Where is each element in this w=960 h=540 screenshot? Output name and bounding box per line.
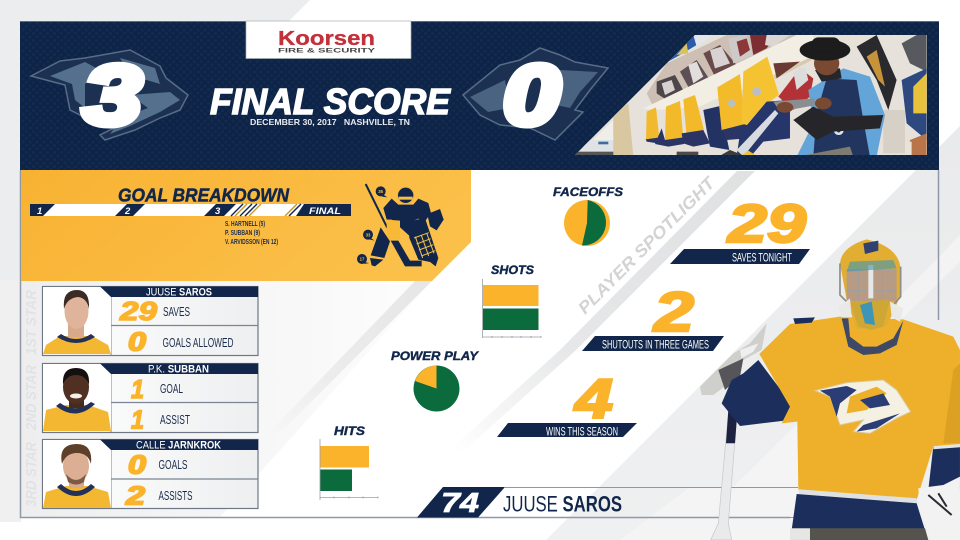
- jersey crest: [815, 380, 911, 433]
- stat: goals allowed: GOALS ALLOWED: [162, 336, 234, 350]
- home score number: 0: [503, 48, 560, 142]
- stat: wins: [497, 367, 637, 438]
- chart: hits: [320, 426, 378, 500]
- person: stick blade and hands: [773, 98, 816, 110]
- stat: goals allowed: 0: [128, 326, 147, 356]
- icon: goalie: 35: [378, 189, 384, 194]
- name header: [100, 286, 258, 297]
- stat: goal: GOAL: [160, 382, 183, 396]
- stat: assist: [131, 404, 190, 434]
- sidebar labels: star rankings: 3RD STAR: [23, 442, 40, 507]
- stat: saves tonight: 29: [727, 194, 806, 254]
- header band: [20, 21, 939, 170]
- person: head and hat: [815, 68, 842, 82]
- period bar: 3: [215, 206, 221, 217]
- chart: power play: [391, 351, 479, 412]
- stat: saves tonight: SAVES TONIGHT: [732, 252, 792, 264]
- upper wall: [647, 35, 800, 107]
- stat: shutouts: 2: [653, 280, 694, 343]
- stat: assists: 2: [125, 480, 146, 510]
- panel: second star card: [42, 364, 258, 434]
- player nameplate: JUUSE SAROS: [503, 492, 622, 516]
- hem: [798, 489, 917, 503]
- navy sleeve: [722, 360, 793, 426]
- name header: [100, 440, 258, 450]
- period bar: 2: [124, 206, 131, 217]
- goalie mask: [838, 239, 903, 330]
- stat: assists: [125, 480, 192, 510]
- stat: assists: ASSISTS: [158, 489, 192, 503]
- goal scorers list: V. ARVIDSSON (EN 12): [225, 237, 278, 246]
- logo: Minnesota Wild: [463, 48, 608, 140]
- panel: goal breakdown: [21, 170, 471, 281]
- sidebar labels: star rankings: [23, 290, 40, 507]
- period bar: 1: [37, 206, 42, 217]
- jersey: [759, 317, 960, 500]
- player spotlight label: PLAYER SPOTLIGHT: [574, 172, 720, 318]
- panel: second star card: P.K. SUBBAN: [148, 364, 209, 376]
- stat: goals: 0: [128, 450, 147, 480]
- player nameplate: 74: [441, 487, 480, 518]
- floor items: [676, 152, 698, 155]
- player photo: Saros: [43, 287, 111, 354]
- right arm sleeve: [928, 445, 960, 490]
- stat: saves tonight: [670, 194, 810, 264]
- stat: goal: [131, 374, 183, 404]
- stat: saves: 29: [119, 296, 158, 326]
- away score number: 3: [83, 48, 142, 142]
- panel: first star card: [42, 286, 258, 356]
- stat: goals allowed: [128, 326, 234, 356]
- stat: assist: 1: [131, 404, 144, 434]
- sponsor logo: FIRE & SECURITY: [278, 48, 376, 54]
- period bar: FINAL: [309, 206, 341, 217]
- jerseys: [646, 107, 659, 140]
- panel: first star card: JUUSE SAROS: [146, 286, 212, 298]
- right lockers: [857, 35, 897, 110]
- icon: goalie: [357, 184, 444, 266]
- chart: faceoffs: FACEOFFS: [553, 187, 623, 199]
- photo: locker room: [575, 35, 927, 157]
- stat: assist: ASSIST: [160, 413, 190, 427]
- player photo: Subban: [43, 364, 111, 431]
- chart: faceoffs: [553, 187, 623, 246]
- sidebar labels: star rankings: 1ST STAR: [23, 290, 40, 355]
- chart: hits: HITS: [334, 426, 365, 438]
- stat: saves: [119, 296, 190, 326]
- sidebar labels: star rankings: 2ND STAR: [23, 365, 40, 431]
- frame: [20, 170, 938, 518]
- red gear: [778, 68, 813, 110]
- title: FINAL SCORE: [210, 81, 451, 122]
- sponsor logo: [246, 21, 411, 58]
- jersey collar: [842, 318, 903, 355]
- period bar: [30, 204, 351, 217]
- name header: [100, 364, 258, 374]
- player figure: goalie Juuse Saros: [700, 239, 960, 540]
- blocker glove: [918, 477, 960, 540]
- date and location: DECEMBER 30, 2017 NASHVILLE, TN: [250, 117, 410, 127]
- person: jersey: [797, 68, 885, 157]
- chart: power play: POWER PLAY: [391, 351, 479, 363]
- icon: goalie: 17: [360, 257, 365, 262]
- shelf: [644, 35, 813, 110]
- goal scorers list: [225, 219, 278, 246]
- skates: [656, 75, 683, 98]
- logo: Nashville Predators: [31, 50, 188, 140]
- stat: wins: 4: [574, 367, 613, 430]
- panel: third star card: CALLE JARNKROK: [136, 440, 221, 452]
- player photo: Jarnkrok: [43, 440, 111, 508]
- chart: shots: [482, 265, 541, 338]
- stat: shutouts: [582, 280, 724, 352]
- left glove: [700, 323, 767, 395]
- player nameplate: [417, 487, 798, 518]
- heading: goal breakdown: GOAL BREAKDOWN: [118, 184, 290, 206]
- goal scorers list: S. HARTNELL (5): [225, 219, 265, 228]
- panel: third star card: [42, 440, 258, 510]
- chart: shots: SHOTS: [491, 265, 534, 277]
- stat: goal: 1: [131, 374, 144, 404]
- icon: goalie: 33: [366, 232, 371, 237]
- stat: wins: WINS THIS SEASON: [546, 426, 618, 438]
- hockey stick: [711, 377, 740, 540]
- stat: goals: GOALS: [158, 458, 188, 472]
- goal scorers list: P. SUBBAN (9): [225, 228, 260, 237]
- stat: shutouts: SHUTOUTS IN THREE GAMES: [602, 340, 709, 352]
- stat: goals: [128, 450, 188, 480]
- stat: saves: SAVES: [163, 305, 190, 319]
- sponsor logo: Koorsen: [278, 28, 375, 50]
- photo: locker room: 70: [820, 114, 845, 140]
